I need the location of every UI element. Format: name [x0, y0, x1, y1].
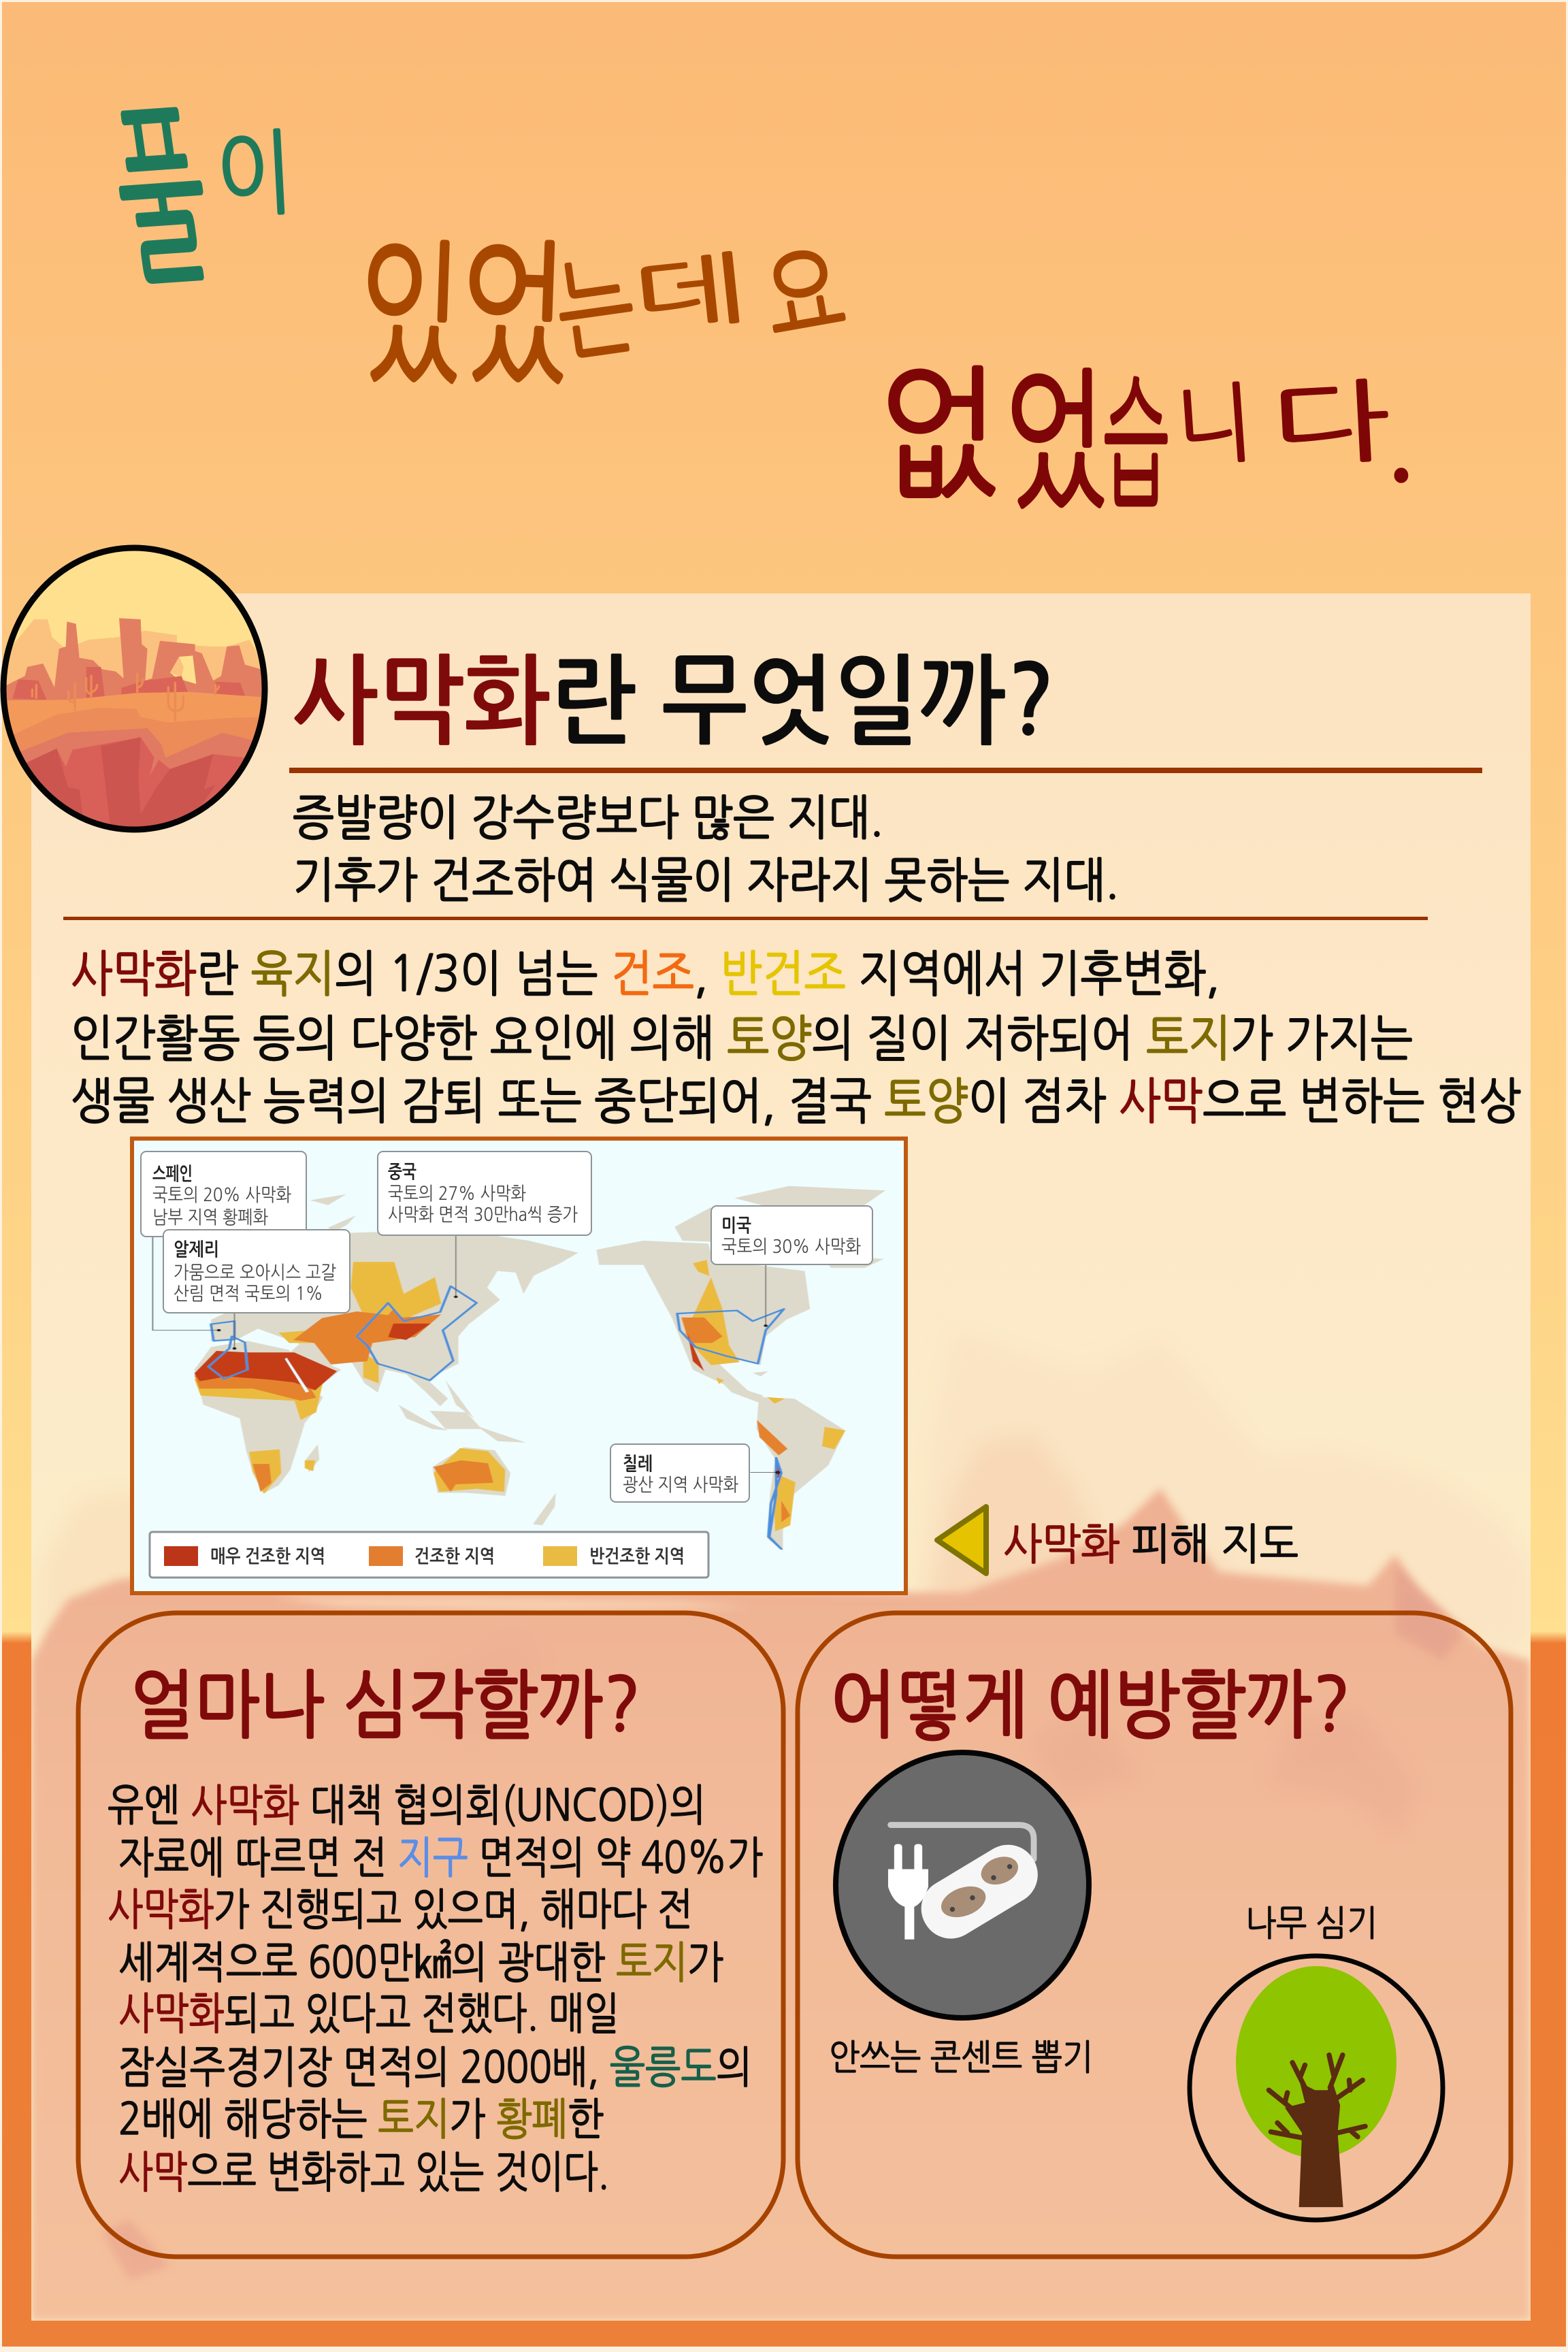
- title: 없었습니다.: 없: [878, 363, 1000, 502]
- rule under definition: [63, 917, 1428, 920]
- title: 있었는데요: 는: [551, 251, 641, 367]
- callout: 칠레: [610, 1444, 749, 1502]
- callout: 중국: 사막화 면적 30만ha씩 증가: [388, 1205, 578, 1224]
- map legend: 반건조한 지역: [589, 1547, 685, 1566]
- callout: 알제리: [163, 1230, 350, 1313]
- title: 없었습니다.: 었: [1003, 364, 1105, 514]
- pink ridges: [1028, 1708, 1143, 1797]
- text block: how serious: 자료에 따르면 전 지구 면적의 약 40%가: [118, 1836, 763, 1880]
- callout: 스페인: 국토의 20% 사막화: [152, 1186, 291, 1204]
- panel: main content sheet: [31, 593, 1531, 2321]
- callout: 알제리: 산림 면적 국토의 1%: [174, 1284, 323, 1303]
- title: 풀이: 풀: [105, 103, 218, 294]
- text block: explanation: 생물 생산 능력의 감퇴 또는 중단되어, 결국 토양이 점차 사막으로 변하는 현상: [71, 1077, 1521, 1126]
- heading: how serious: 얼마나 심각할까?: [130, 1668, 640, 1742]
- text block: how serious: 잠실주경기장 면적의 2000배, 울릉도의: [118, 2046, 752, 2089]
- callout: 알제리: 가뭄으로 오아시스 고갈: [174, 1263, 336, 1281]
- text block: definition: [293, 794, 1119, 904]
- title: 없었습니다.: 니: [1173, 379, 1256, 470]
- callout: 스페인: 스페인: [152, 1164, 193, 1183]
- title: 없었습니다.: .: [1388, 402, 1413, 490]
- arrow: points to map: [937, 1507, 986, 1573]
- map legend: 건조한 지역: [414, 1547, 495, 1566]
- text block: how serious: 유엔 사막화 대책 협의회(UNCOD)의: [108, 1784, 706, 1827]
- title: 없었습니다.: 습: [1103, 374, 1169, 513]
- text block: how serious: 사막으로 변화하고 있는 것이다.: [118, 2151, 609, 2194]
- text block: explanation: 사막화란 육지의 1/3이 넘는 건조, 반건조 지역에서 기후변화,: [71, 949, 1220, 998]
- callout: 미국: 국토의 30% 사막화: [721, 1237, 861, 1256]
- callout: 스페인: [141, 1152, 306, 1237]
- text block: definition: 기후가 건조하여 식물이 자라지 못하는 지대.: [293, 857, 1119, 904]
- map shapes: [151, 1186, 886, 1550]
- callout: 미국: [711, 1206, 872, 1264]
- map legend: [150, 1532, 708, 1578]
- heading: how to prevent: 어떻게 예방할까?: [830, 1668, 1350, 1742]
- callout: 미국: 미국: [721, 1216, 751, 1235]
- map legend: 매우 건조한 지역: [210, 1547, 325, 1566]
- icon: power strip and plug: [836, 1752, 1089, 2018]
- text block: how serious: 사막화되고 있다고 전했다. 매일: [118, 1992, 619, 2036]
- label: unplug: 안쓰는 콘센트 뽑기: [829, 2040, 1093, 2075]
- icon: desert landscape circle: [0, 548, 267, 849]
- text block: how serious: [108, 1784, 763, 2194]
- title: 있었는데요: 었: [457, 233, 570, 391]
- text block: explanation: 인간활동 등의 다양한 요인에 의해 토양의 질이 저하되어 토지가 가지는: [71, 1014, 1413, 1063]
- callout: 중국: 중국: [388, 1162, 416, 1181]
- callout: 중국: [378, 1152, 591, 1235]
- near hills: [31, 1488, 1531, 2321]
- label: plant trees: 나무 심기: [1245, 1906, 1377, 1941]
- text block: explanation: [71, 949, 1521, 1126]
- text block: definition: 증발량이 강수량보다 많은 지대.: [293, 794, 883, 842]
- title: 있었는데요: 데: [631, 248, 751, 337]
- icon: tree: [1190, 1956, 1443, 2220]
- faint distant hills: [912, 1328, 1531, 1647]
- title: 없었습니다.: [878, 363, 1413, 514]
- panel: world map: [132, 1139, 906, 1593]
- map caption: 사막화 피해 지도: [1003, 1523, 1298, 1566]
- text block: how serious: 세계적으로 600만㎢의 광대한 토지가: [118, 1940, 723, 1984]
- text block: how serious: 2배에 해당하는 토지가 황폐한: [118, 2097, 604, 2141]
- panel: how serious: [78, 1613, 783, 2257]
- rule under heading: [289, 768, 1482, 773]
- title: 있었는데요: 있: [356, 235, 463, 391]
- callout: 알제리: 알제리: [174, 1240, 219, 1259]
- title: 없었습니다.: 다: [1269, 376, 1392, 470]
- title: 풀이: 이: [214, 127, 295, 222]
- callout: 중국: 국토의 27% 사막화: [388, 1184, 526, 1203]
- text block: how serious: 사막화가 진행되고 있으며, 해마다 전: [108, 1888, 693, 1931]
- title: 있었는데요: 요: [757, 236, 851, 354]
- title: 있었는데요: [356, 233, 851, 391]
- heading: 사막화란 무엇일까?: 사막화란 무엇일까?: [292, 653, 1056, 750]
- title: 풀이: [105, 103, 295, 294]
- callout: 칠레: 광산 지역 사막화: [623, 1475, 738, 1494]
- panel: how to prevent: [798, 1613, 1511, 2257]
- light gaps above boxes: [272, 1597, 749, 1612]
- callout: 스페인: 남부 지역 황폐화: [152, 1208, 268, 1226]
- callout: 칠레: 칠레: [623, 1454, 653, 1473]
